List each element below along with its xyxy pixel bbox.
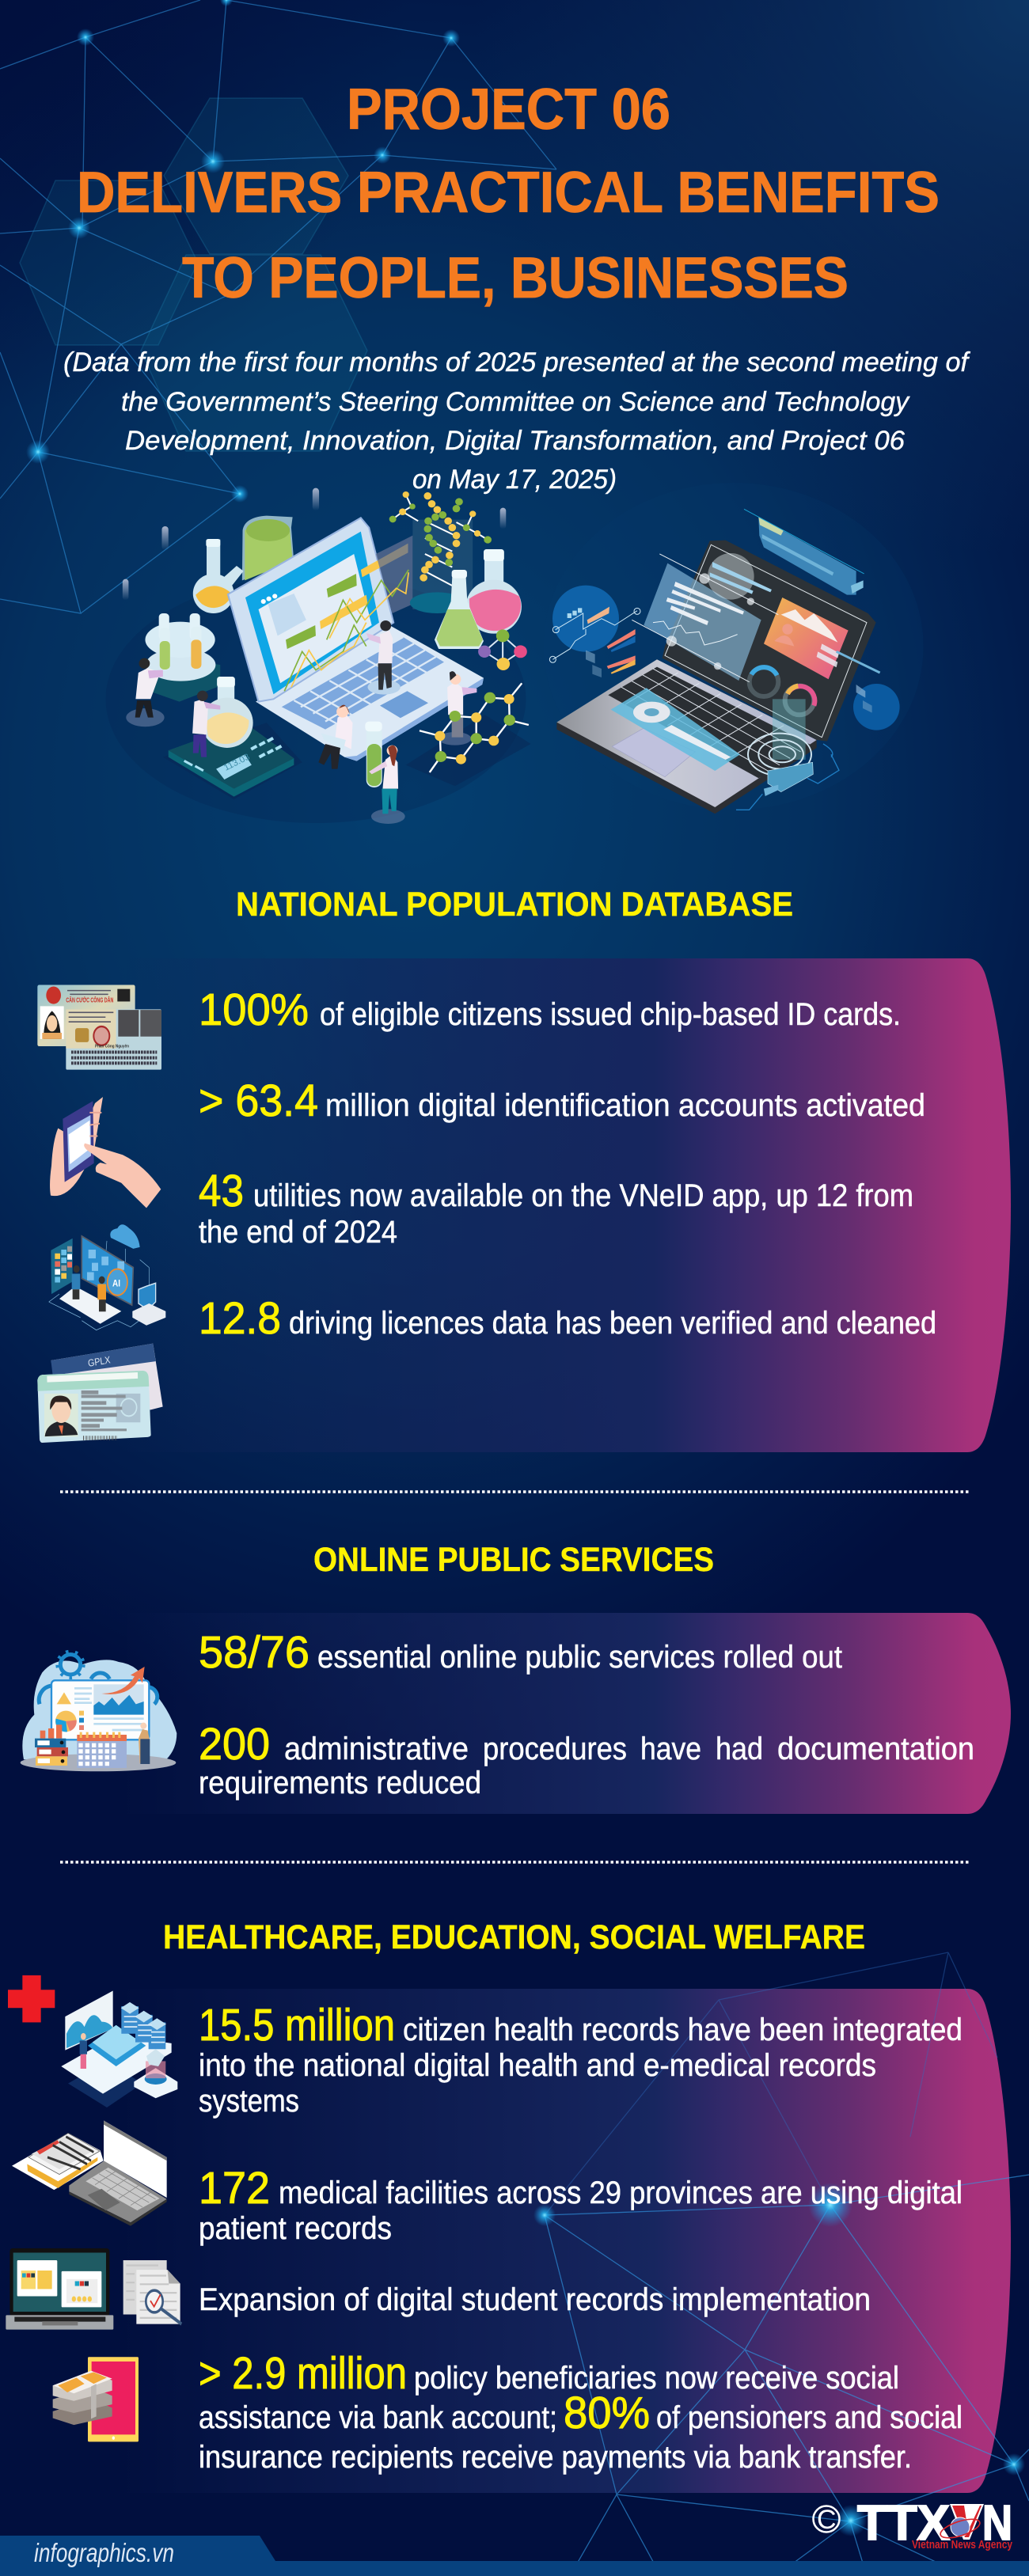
beaker — [242, 516, 294, 580]
trackpad — [612, 728, 695, 777]
heading: healthcare, education, social welfare: HEALTHCARE, EDUCATION, SOCIAL WELFARE — [163, 1918, 865, 1956]
item: medical facilities: patient records — [199, 2211, 392, 2246]
icon: AI data screen — [49, 1224, 165, 1330]
item: citizen health records: citizen health records have been integrated — [403, 2013, 963, 2047]
molecule triangle — [478, 629, 527, 670]
item: social assistance and pensions: policy beneficiaries now receive social — [414, 2361, 899, 2396]
scale with flask — [169, 677, 294, 797]
hexagon molecule — [420, 683, 529, 772]
icon: hand holding smartphone — [50, 1097, 161, 1208]
icon: red cross — [8, 1975, 55, 2022]
panel: healthcare, education, social welfare background — [127, 1989, 1011, 2493]
item: medical facilities: 172 — [199, 2163, 270, 2214]
item: administrative procedures: documentation — [777, 1732, 974, 1766]
subtitle: (Data from the first four months of 2025 presented at the second meeting of — [63, 347, 971, 377]
network lines bottom right, upper faint part — [545, 1952, 997, 2215]
translucent blue card on keyboard — [611, 688, 740, 771]
conical flask green — [435, 570, 484, 649]
item: digital identification accounts: > 63.4 — [199, 1076, 318, 1126]
laptop screen — [663, 541, 876, 742]
scale with flask: 113.03 — [222, 753, 252, 773]
wireless waves and box — [736, 699, 839, 810]
keyboard — [608, 667, 817, 778]
title: DELIVERS PRACTICAL BENEFITS — [77, 161, 940, 225]
network glow nodes top left — [26, 0, 460, 503]
icon: citizen ID cards: CĂN CƯỚC CÔNG DÂN — [66, 996, 113, 1004]
logo: TTXVN Vietnam News Agency: TTX — [857, 2496, 950, 2551]
logo: TTXVN Vietnam News Agency: N — [982, 2496, 1012, 2551]
translucent data panel — [632, 553, 880, 682]
icon: laptop with medical documents — [12, 2120, 167, 2226]
heading: national population database: NATIONAL POPULATION DATABASE — [236, 886, 793, 924]
subtitle: the Government’s Steering Committee on Science and Technology — [121, 387, 910, 417]
item: administrative procedures: procedures — [483, 1732, 627, 1766]
right circle — [853, 684, 900, 730]
item: administrative procedures: had — [716, 1732, 763, 1766]
illustration: science laboratory on laptop — [105, 488, 531, 824]
test tube and scientist — [365, 722, 405, 824]
item: social assistance and pensions: assistance via bank account; — [199, 2400, 557, 2435]
molecule small — [389, 491, 492, 544]
item: digital identification accounts: million digital identification accounts activated — [325, 1088, 925, 1123]
subtitle: Development, Innovation, Digital Transformation, and Project 06 — [125, 426, 905, 456]
item: medical facilities: medical facilities across 29 provinces are using digital — [279, 2176, 963, 2210]
item: chip-based ID cards — [199, 984, 901, 1035]
scientist left — [126, 658, 165, 727]
item: driving licences: 12.8 — [199, 1293, 281, 1344]
title — [77, 78, 940, 310]
item: administrative procedures: 200 — [199, 1719, 270, 1770]
item: medical facilities — [199, 2163, 963, 2246]
item: social assistance and pensions — [199, 2348, 963, 2475]
item: administrative procedures: requirements reduced — [199, 1766, 481, 1800]
illustration: laptop with holographic data — [544, 483, 924, 814]
floating panel top — [744, 509, 864, 595]
title: PROJECT 06 — [347, 78, 670, 142]
laptop screen — [228, 518, 412, 702]
item: driving licences: driving licences data has been verified and cleaned — [289, 1306, 936, 1341]
network lines top left — [0, 0, 556, 613]
round flask yellow — [193, 539, 244, 613]
gradient card on screen — [764, 598, 849, 679]
icon: laptop with student records — [6, 2248, 181, 2330]
icon: citizen ID cards: Phan Công Nguyên — [95, 1044, 129, 1049]
item: social assistance and pensions: insurance recipients receive payments via bank transfer. — [199, 2440, 912, 2475]
item: essential online public services: essential online public services rolled out — [317, 1640, 842, 1675]
ring charts — [750, 667, 814, 715]
logo: TTXVN Vietnam News Agency — [814, 2496, 1012, 2551]
item: administrative procedures: have — [640, 1732, 701, 1766]
panel: online public services background — [127, 1613, 1011, 1814]
item: citizen health records — [199, 2000, 963, 2119]
item: social assistance and pensions: of pensioners and social — [656, 2400, 963, 2435]
item: VNeID utilities: utilities now available on the VNeID app, up 12 from — [253, 1178, 913, 1213]
network lines bottom right — [545, 2175, 1029, 2576]
panel: national population database background — [127, 958, 1011, 1452]
item: citizen health records: systems — [199, 2084, 299, 2119]
test tube stand — [145, 613, 220, 702]
hexagon background pattern — [20, 98, 367, 451]
item: digital student records: Expansion of digital student records implementation — [199, 2282, 871, 2317]
footer band — [0, 2536, 1029, 2576]
logo: TTXVN Vietnam News Agency: C — [817, 2505, 837, 2535]
item: social assistance and pensions: > 2.9 million — [199, 2348, 407, 2399]
item: driving licences — [199, 1293, 936, 1344]
title: TO PEOPLE, BUSINESSES — [182, 246, 849, 310]
left circle with circuit — [549, 586, 640, 677]
item: essential online public services — [199, 1627, 842, 1678]
icon: AI data screen: AI — [112, 1279, 120, 1289]
icon: driving licence GPLX: GPLX — [87, 1354, 111, 1369]
DNA helix — [410, 492, 473, 613]
scientist on keyboard — [366, 620, 401, 695]
item: chip-based ID cards: of eligible citizens issued chip-based ID cards. — [320, 997, 901, 1032]
scientist right — [439, 671, 477, 745]
item: citizen health records: into the national digital health and e-medical records — [199, 2048, 876, 2083]
item: chip-based ID cards: 100% — [199, 984, 309, 1035]
line charts — [284, 570, 408, 691]
laptop base — [256, 625, 484, 761]
icon: driving licence GPLX — [37, 1344, 163, 1443]
laptop keyboard — [282, 637, 444, 730]
scientist at scale — [192, 691, 220, 757]
subtitle — [63, 347, 971, 495]
item: VNeID utilities — [199, 1166, 913, 1250]
pink round flask — [466, 549, 522, 634]
item: administrative procedures — [199, 1719, 974, 1800]
footer source: infographics.vn — [34, 2538, 174, 2567]
icon: dashboard with gears and calendar — [21, 1652, 177, 1771]
icon: citizen ID cards — [37, 985, 161, 1070]
item: VNeID utilities: the end of 2024 — [199, 1215, 397, 1250]
item: digital identification accounts — [199, 1076, 925, 1126]
item: VNeID utilities: 43 — [199, 1166, 244, 1216]
network glow nodes bottom right — [533, 2183, 1025, 2536]
heading: online public services: ONLINE PUBLIC SERVICES — [313, 1541, 714, 1579]
icon: data platform with servers — [61, 1991, 177, 2107]
item: administrative procedures: administrative — [284, 1732, 469, 1766]
laptop base — [556, 659, 817, 814]
item: social assistance and pensions: 80% — [564, 2388, 650, 2438]
item: citizen health records: 15.5 million — [199, 2000, 395, 2051]
icon: smartphone with banknotes — [53, 2357, 139, 2441]
scientist seated — [318, 705, 352, 769]
item: essential online public services: 58/76 — [199, 1627, 309, 1678]
subtitle: on May 17, 2025) — [412, 465, 617, 495]
